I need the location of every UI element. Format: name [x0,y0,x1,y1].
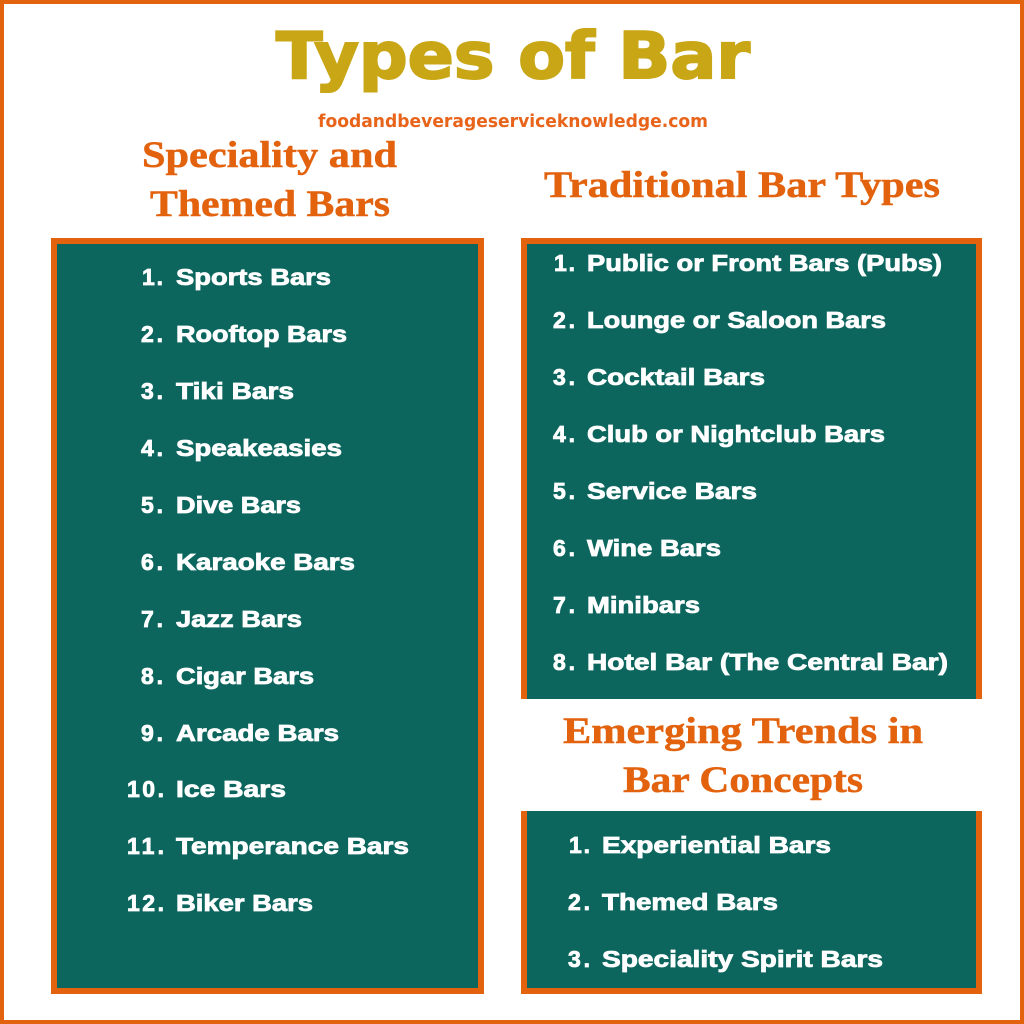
panel: traditional bar types [521,238,982,699]
list: traditional bars: 6. [553,535,575,561]
heading: traditional bar types: Traditional Bar Types [544,165,940,206]
list: traditional bars: Lounge or Saloon Bars [587,307,886,333]
heading: speciality and themed bars: Speciality and [142,135,397,176]
heading: emerging trends: Bar Concepts [623,760,863,801]
list: emerging trends: 1. [569,832,590,858]
list: speciality bars: Dive Bars [176,492,301,518]
list: emerging trends: Experiential Bars [602,832,831,858]
list: speciality bars: 12. [127,890,164,916]
list: traditional bars: 2. [553,307,575,333]
heading: emerging trends [563,711,923,801]
list: emerging trends: 2. [568,889,590,915]
list: traditional bars: Minibars [587,592,700,618]
list: speciality bars [127,264,409,916]
title: Types of Bar [276,20,750,94]
list: speciality bars: 3. [141,378,163,404]
panel: emerging trends [521,811,982,994]
list: traditional bars: 4. [553,421,575,447]
list: emerging trends [568,832,883,972]
list: speciality bars: 2. [141,321,163,347]
list: speciality bars: Karaoke Bars [176,549,355,575]
list: speciality bars: 1. [142,264,163,290]
list: traditional bars: Cocktail Bars [587,364,765,390]
list: speciality bars: Jazz Bars [176,606,302,632]
panel: speciality and themed bars [54,241,481,991]
list: speciality bars: Speakeasies [176,435,342,461]
list: traditional bars: Public or Front Bars (Pubs) [587,250,942,276]
list: speciality bars: Rooftop Bars [176,321,347,347]
list: traditional bars [553,250,948,675]
list: speciality bars: 5. [141,492,163,518]
list: speciality bars: Arcade Bars [176,720,339,746]
list: speciality bars: Ice Bars [176,776,286,802]
list: speciality bars: 6. [141,549,163,575]
list: traditional bars: 5. [553,478,575,504]
list: traditional bars: 1. [554,250,575,276]
list: traditional bars: Service Bars [587,478,757,504]
heading: emerging trends: Emerging Trends in [563,711,923,752]
list: speciality bars: 8. [141,663,163,689]
heading: speciality and themed bars [142,135,397,225]
list: emerging trends: 3. [568,946,590,972]
list: traditional bars: 3. [553,364,575,390]
list: speciality bars: 11. [127,833,164,859]
heading: speciality and themed bars: Themed Bars [150,184,390,225]
list: speciality bars: Tiki Bars [176,378,294,404]
list: traditional bars: Hotel Bar (The Central Bar) [587,649,948,675]
list: speciality bars: 10. [127,776,164,802]
list: traditional bars: 7. [553,592,575,618]
list: speciality bars: Cigar Bars [176,663,314,689]
list: speciality bars: 4. [141,435,163,461]
list: traditional bars: 8. [553,649,575,675]
list: traditional bars: Wine Bars [587,535,721,561]
list: speciality bars: 9. [141,720,163,746]
list: emerging trends: Speciality Spirit Bars [602,946,883,972]
list: speciality bars: Sports Bars [176,264,331,290]
list: traditional bars: Club or Nightclub Bars [587,421,885,447]
list: speciality bars: Biker Bars [176,890,313,916]
list: speciality bars: 7. [141,606,163,632]
list: emerging trends: Themed Bars [602,889,778,915]
list: speciality bars: Temperance Bars [176,833,409,859]
website url: foodandbeverageserviceknowledge.com [318,111,708,132]
